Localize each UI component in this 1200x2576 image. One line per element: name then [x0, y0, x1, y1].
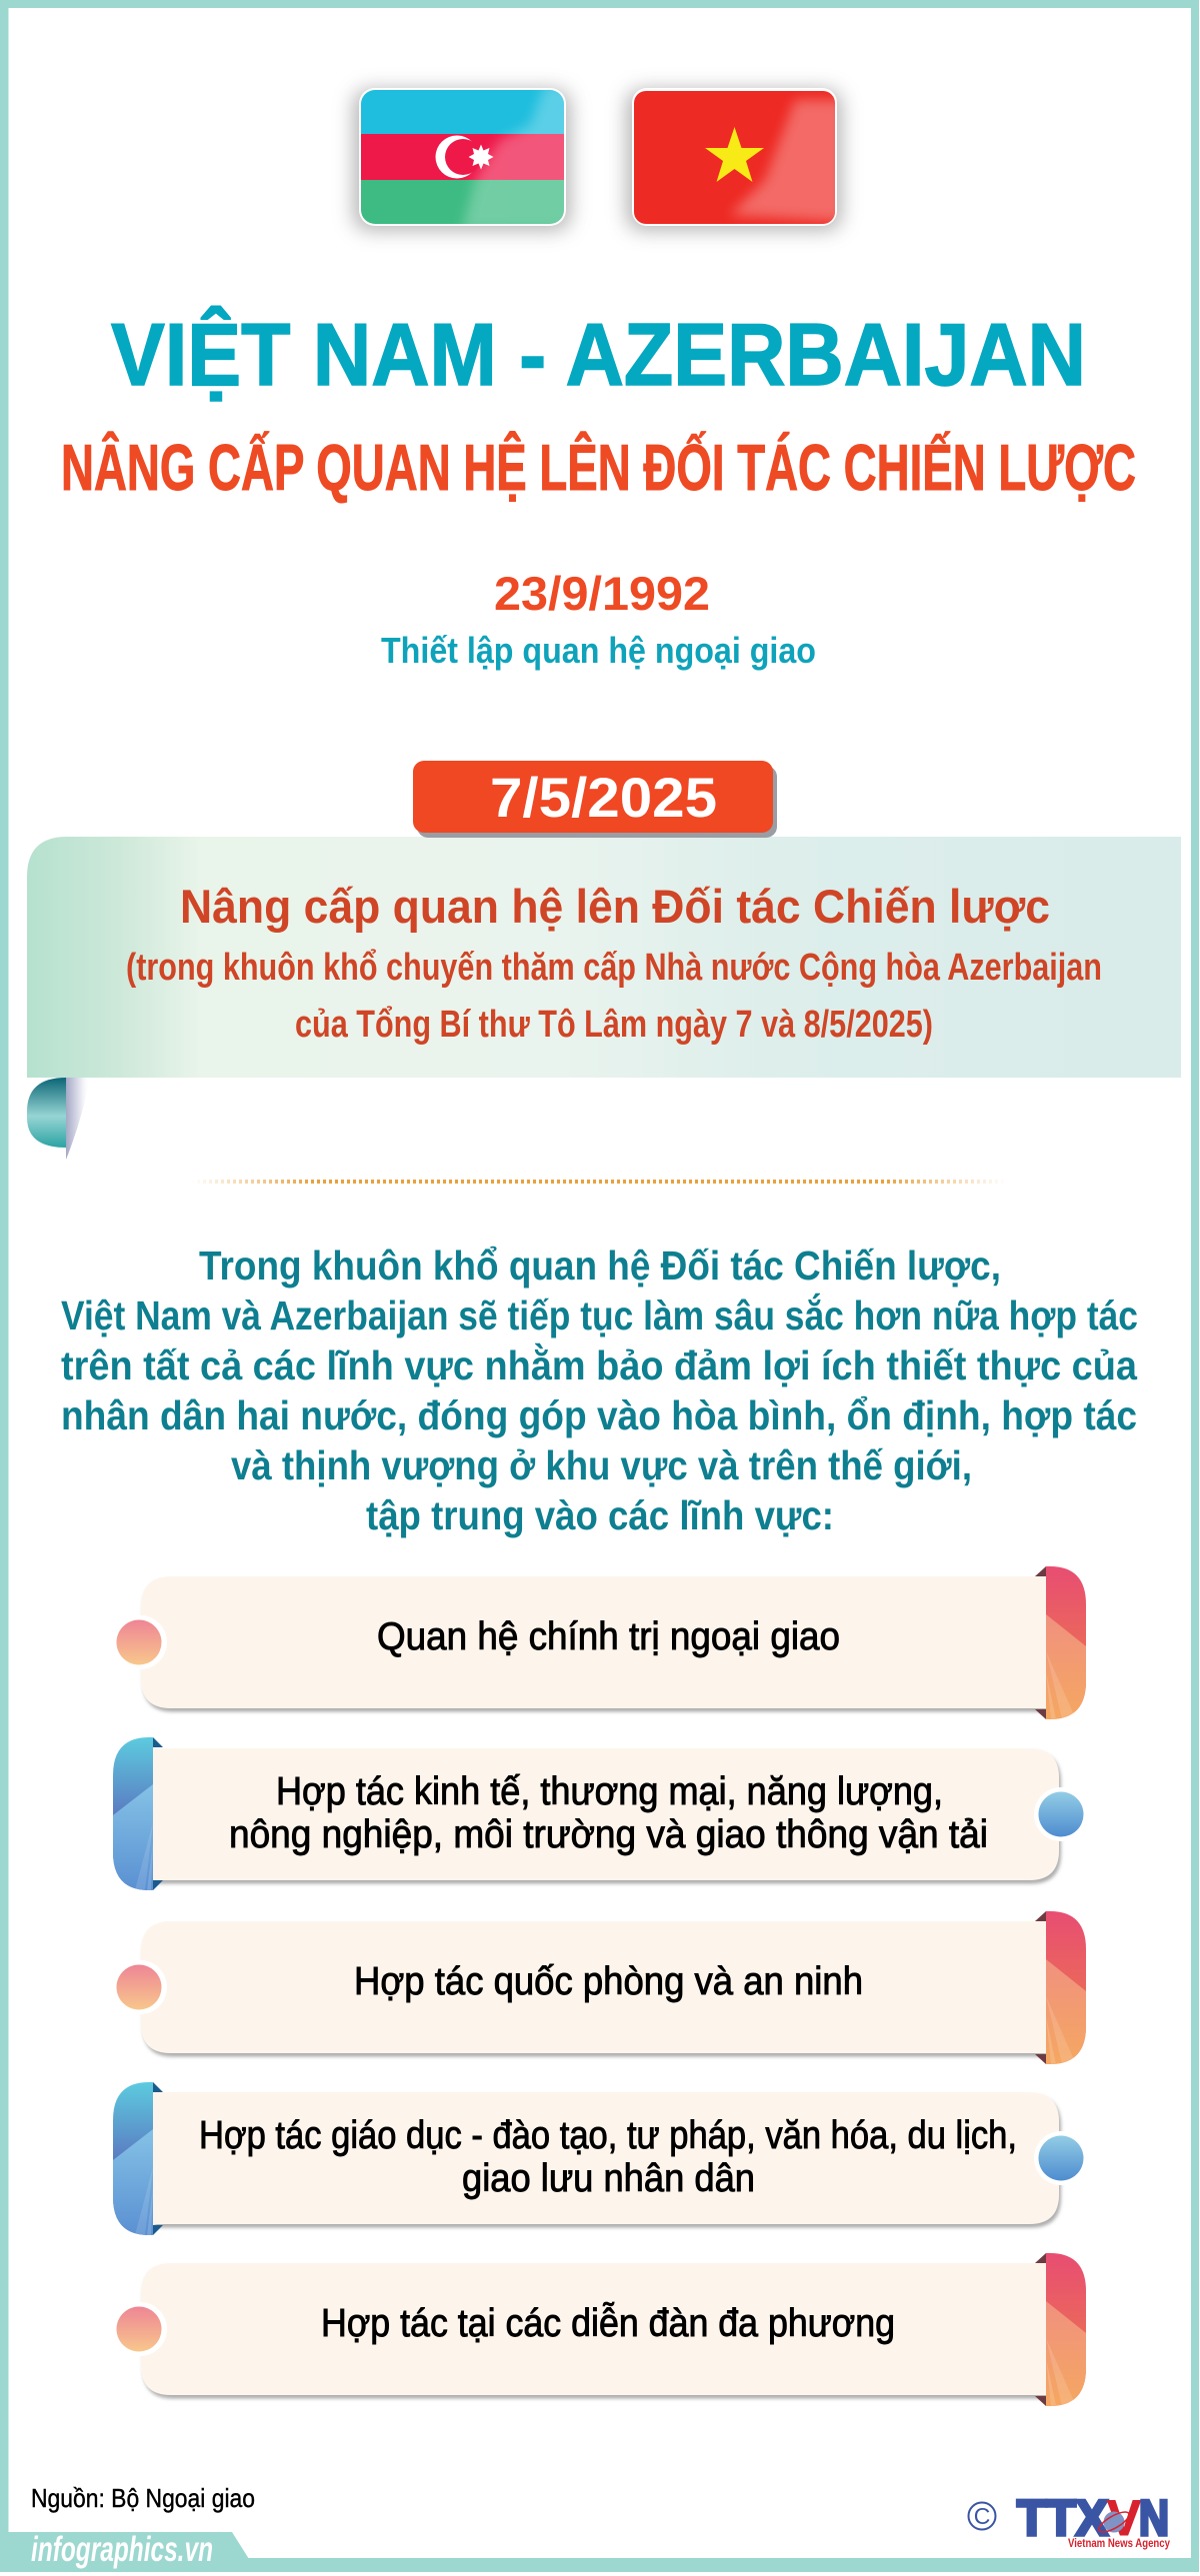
- ribbon text: Nâng cấp quan hệ lên Đối tác Chiến lược: [180, 880, 1050, 933]
- panel: card 4 education and culture: giao lưu nhân dân: [462, 2157, 755, 2200]
- icon: flag of Vietnam: [627, 88, 845, 230]
- source note: Nguồn: Bộ Ngoại giao: [31, 2483, 255, 2513]
- icon: flag of Azerbaijan: [354, 85, 580, 230]
- panel: card 2 economic cooperation: [113, 1737, 1088, 1890]
- date: 23/9/1992: 23/9/1992: [494, 567, 710, 620]
- logo: TTXVN: TTX: [1017, 2490, 1108, 2546]
- panel: card 1 political and diplomatic relations: [113, 1566, 1086, 1719]
- icon: red tab: [1035, 1566, 1086, 1719]
- logo: TTXVN: V: [1107, 2490, 1142, 2546]
- text block: intro paragraph: tập trung vào các lĩnh vực:: [366, 1492, 834, 1538]
- text block: intro paragraph: và thịnh vượng ở khu vực và trên thế giới,: [231, 1442, 972, 1488]
- title: VIỆT NAM - AZERBAIJAN: [111, 305, 1086, 404]
- panel: card 4 education and culture: [113, 2082, 1088, 2235]
- text block: intro paragraph: trên tất cả các lĩnh vực nhằm bảo đảm lợi ích thiết thực của: [61, 1342, 1138, 1388]
- icon: blue tab: [113, 2082, 163, 2235]
- icon: red tab: [1035, 2253, 1086, 2406]
- footer tab: infographics.vn: infographics.vn: [31, 2530, 213, 2569]
- icon: blue tab: [113, 1737, 163, 1890]
- panel: card 1 political and diplomatic relations: Quan hệ chính trị ngoại giao: [377, 1615, 840, 1658]
- panel: card 2 economic cooperation: Hợp tác kinh tế, thương mại, năng lượng,: [276, 1770, 943, 1813]
- icon: ribbon curl: [27, 1078, 90, 1160]
- logo: TTXVN: C: [974, 2503, 990, 2529]
- panel: card 5 multilateral forums: [113, 2253, 1086, 2406]
- logo: TTXVN: [968, 2490, 1170, 2550]
- text block: intro paragraph: [61, 1243, 1138, 1538]
- ribbon text: [126, 880, 1102, 1046]
- logo: TTXVN: N: [1139, 2490, 1169, 2546]
- panel: ribbon upgrade announcement: [27, 837, 1181, 1160]
- panel: card 3 defence and security: [113, 1911, 1086, 2064]
- text block: intro paragraph: Trong khuôn khổ quan hệ Đối tác Chiến lược,: [199, 1243, 1001, 1288]
- panel: card 3 defence and security: Hợp tác quốc phòng và an ninh: [354, 1960, 863, 2003]
- logo: TTXVN: Vietnam News Agency: [1068, 2536, 1170, 2550]
- badge: 7/5/2025: [413, 761, 777, 838]
- panel: card 2 economic cooperation: nông nghiệp, môi trường và giao thông vận tải: [229, 1813, 988, 1856]
- panel: card 4 education and culture: Hợp tác giáo dục - đào tạo, tư pháp, văn hóa, du lịch,: [199, 2114, 1017, 2157]
- panel: card 5 multilateral forums: Hợp tác tại các diễn đàn đa phương: [321, 2302, 895, 2345]
- text: establishment of diplomatic relations: Thiết lập quan hệ ngoại giao: [381, 630, 816, 671]
- badge: 7/5/2025: 7/5/2025: [490, 766, 717, 829]
- icon: red tab: [1035, 1911, 1086, 2064]
- ribbon text: của Tổng Bí thư Tô Lâm ngày 7 và 8/5/2025): [295, 1004, 933, 1046]
